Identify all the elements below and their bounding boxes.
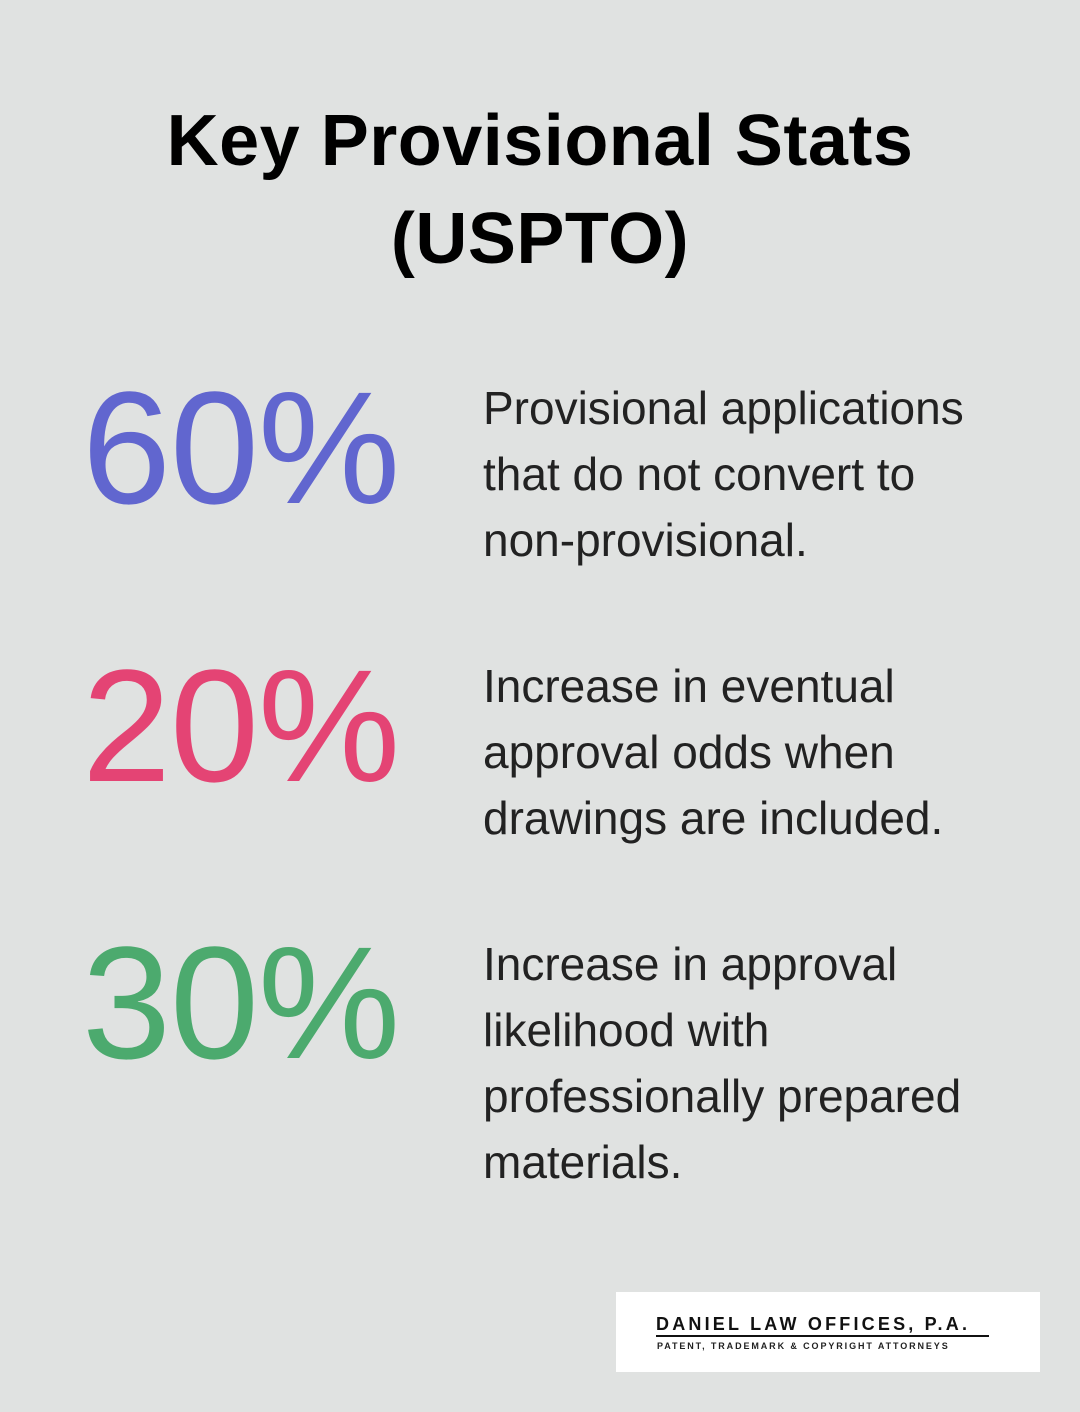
- stat 1 number: 60%: [82, 358, 399, 537]
- stat 1 description: Provisional applications that do not convert to non-provisional.: [483, 382, 964, 566]
- title: [167, 101, 913, 279]
- logo: [616, 1292, 1040, 1372]
- logo: DANIEL LAW OFFICES, P.A.: [656, 1314, 970, 1334]
- stat 3 number: 30%: [82, 913, 399, 1092]
- logo: PATENT, TRADEMARK & COPYRIGHT ATTORNEYS: [657, 1341, 950, 1351]
- stat 2 description: Increase in eventual approval odds when drawings are included.: [483, 660, 943, 844]
- title: (USPTO): [391, 199, 689, 279]
- title: Key Provisional Stats: [167, 101, 913, 181]
- stat 2 number: 20%: [82, 636, 399, 815]
- stat 3 description: Increase in approval likelihood with professionally prepared materials.: [483, 938, 961, 1188]
